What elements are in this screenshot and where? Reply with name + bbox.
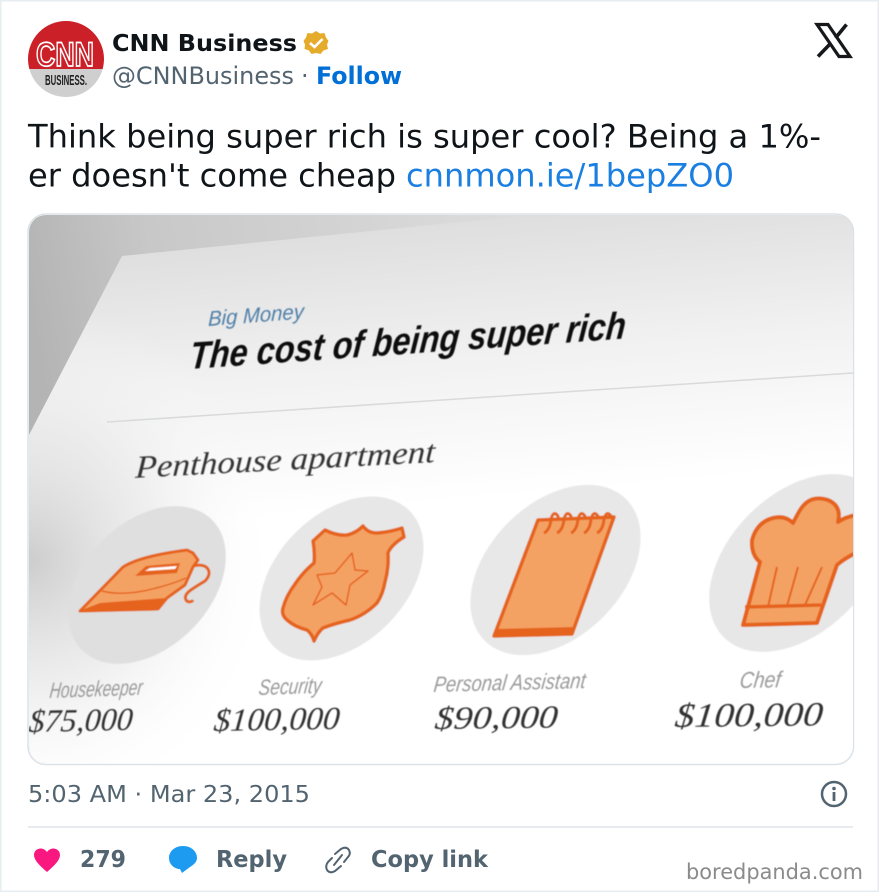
icon: speech bubble xyxy=(169,846,197,873)
item: security xyxy=(212,496,424,736)
icon: iron xyxy=(79,550,209,611)
icon: heart xyxy=(34,848,60,872)
handle and follow: · xyxy=(301,62,309,90)
icon: chef hat xyxy=(743,498,856,625)
background sheet behind the paper xyxy=(29,215,529,763)
handle and follow: @CNNBusiness xyxy=(112,62,294,90)
icon: notepad xyxy=(494,514,614,636)
avatar: CNN Business logo xyxy=(28,21,104,97)
amount: $90,000 xyxy=(433,699,560,736)
account name: CNN Business xyxy=(112,29,297,57)
icon background circle xyxy=(709,474,853,652)
amount: $100,000 xyxy=(673,696,825,735)
item: chef xyxy=(674,474,853,732)
icon: X logo xyxy=(817,24,850,56)
item: housekeeper xyxy=(29,506,226,736)
divider line xyxy=(107,373,853,422)
handle and follow: Follow xyxy=(316,62,402,90)
icon: info xyxy=(822,782,846,806)
label: Personal Assistant xyxy=(432,668,588,697)
timestamp: 5:03 AM · Mar 23, 2015 xyxy=(28,780,310,808)
tweet text: er doesn't come cheap xyxy=(28,156,396,194)
handle and follow xyxy=(112,62,402,90)
amount: $100,000 xyxy=(212,700,342,738)
icon: chain link xyxy=(326,848,350,872)
watermark: boredpanda.com: boredpanda.com xyxy=(686,860,863,885)
subheading: Penthouse apartment: Penthouse apartment xyxy=(134,433,437,485)
kicker: Big Money: Big Money xyxy=(208,300,306,331)
amount: $75,000 xyxy=(27,701,134,739)
icon background circle xyxy=(470,484,641,656)
avatar: CNN Business logo: BUSINESS. xyxy=(45,72,87,89)
avatar: CNN Business logo: CNN xyxy=(36,36,94,74)
like count xyxy=(34,847,126,873)
label: Chef xyxy=(738,666,785,693)
panel: infographic image xyxy=(27,214,880,764)
icon: shield xyxy=(282,526,404,641)
heading: The cost of being super rich: The cost of being super rich xyxy=(188,304,628,378)
item: personal assistant xyxy=(433,484,641,734)
label: Housekeeper xyxy=(48,675,145,703)
tweet text xyxy=(27,118,821,194)
icon: gold verified badge xyxy=(304,31,328,54)
paper sheet xyxy=(29,214,853,764)
like count: 279 xyxy=(80,847,126,873)
icon background circle xyxy=(260,496,424,660)
icon background circle xyxy=(76,506,226,664)
label: Security xyxy=(257,673,325,700)
copy link action: Copy link xyxy=(371,847,489,873)
reply action xyxy=(169,846,287,873)
tweet text: cnnmon.ie/1bepZO0 xyxy=(406,156,734,194)
tweet text: Think being super rich is super cool? Being a 1%- xyxy=(27,118,821,156)
reply action: Reply xyxy=(216,847,287,873)
